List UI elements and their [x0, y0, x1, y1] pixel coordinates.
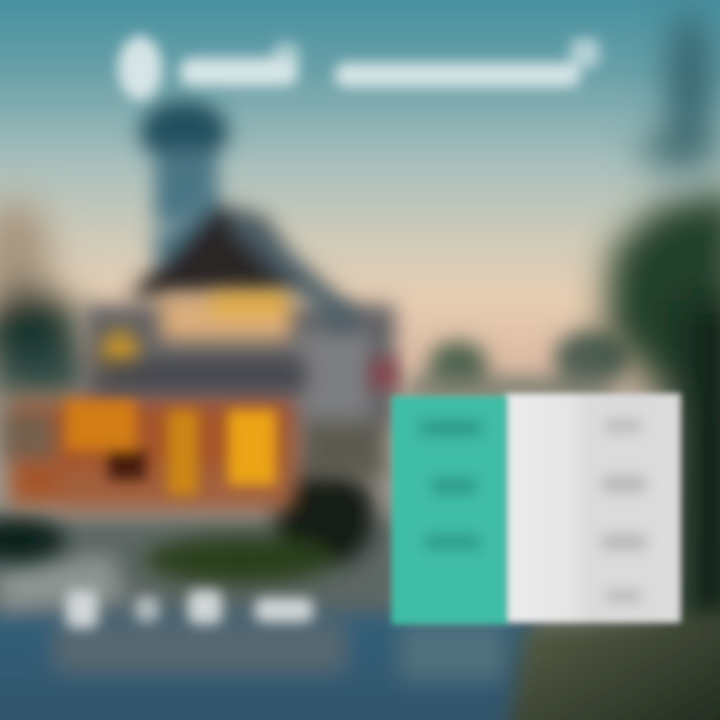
lit ground floor windows — [66, 400, 276, 495]
bottom right ground — [505, 610, 720, 720]
teal column labels — [420, 420, 482, 549]
house — [0, 100, 396, 510]
red accent — [372, 360, 396, 388]
right background trees — [410, 330, 630, 402]
lit gable window — [102, 292, 292, 374]
roof — [128, 190, 365, 335]
left background trees — [0, 200, 90, 400]
table panel — [392, 394, 680, 624]
white column values — [602, 420, 646, 602]
tall dark tree at right edge — [606, 10, 720, 720]
upper wall and lower body — [0, 305, 395, 510]
water and foreground — [0, 520, 540, 720]
table white column — [505, 394, 680, 622]
tower — [140, 100, 228, 225]
foreground shrubs — [0, 463, 375, 584]
title — [118, 36, 600, 100]
bottom caption — [66, 590, 313, 628]
table teal column — [392, 396, 508, 624]
